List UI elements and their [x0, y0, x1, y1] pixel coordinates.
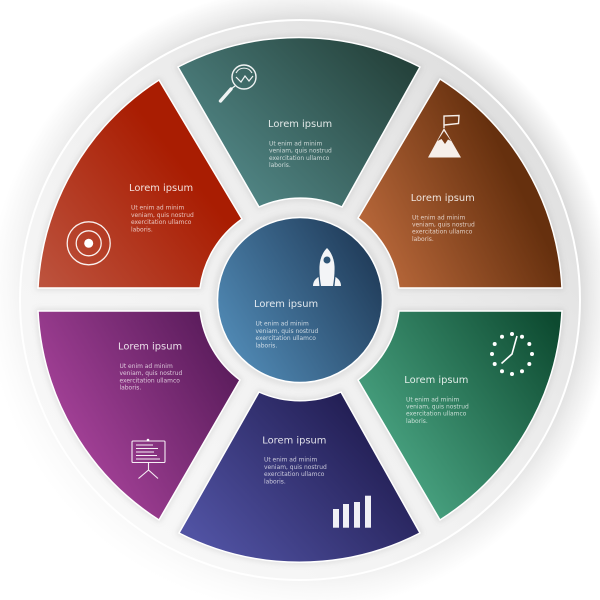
icon: mountain with flag: [428, 116, 461, 158]
body text: Ut enim ad minim: [264, 457, 317, 464]
body text: laboris.: [269, 162, 291, 169]
body text: exercitation ullamco: [406, 411, 467, 418]
body text: exercitation ullamco: [264, 471, 325, 478]
panel: brown segment: [358, 79, 562, 288]
panel: green segment: [358, 311, 562, 520]
icon: clock: [490, 332, 534, 376]
panel: red segment: [38, 80, 242, 288]
body text: veniam, quis nostrud: [256, 328, 318, 335]
body text: exercitation ullamco: [120, 377, 180, 384]
body text: Ut enim ad minim: [269, 140, 322, 148]
body text: laboris.: [406, 418, 428, 425]
heading: Lorem ipsum: [262, 435, 326, 446]
body text: Ut enim ad minim: [412, 214, 465, 221]
circle shape: [218, 218, 382, 382]
body text: veniam, quis nostrud: [264, 464, 327, 471]
body text: veniam, quis nostrud: [406, 404, 469, 410]
panel: purple segment: [38, 311, 240, 520]
segment shape: [38, 311, 240, 520]
body text: laboris.: [264, 478, 286, 485]
segment shape: [358, 79, 562, 288]
body text: Ut enim ad minim: [406, 396, 459, 403]
body text: exercitation ullamco: [256, 335, 316, 342]
body text: laboris.: [120, 385, 141, 392]
heading: Lorem ipsum: [411, 193, 475, 204]
segment shape: [179, 392, 420, 562]
icon: presentation board: [132, 439, 165, 478]
panel: bottom navy segment: [179, 392, 420, 562]
body text: exercitation ullamco: [131, 219, 192, 226]
body text: exercitation ullamco: [269, 155, 330, 162]
segment shape: [358, 311, 562, 520]
body text: Ut enim ad minim: [256, 321, 309, 328]
icon: bar chart: [333, 496, 371, 528]
soft segment shading: [38, 38, 562, 562]
segment shape: [178, 38, 420, 207]
body text: veniam, quis nostrud: [120, 370, 182, 377]
panel: top teal segment: [178, 38, 420, 207]
body text: Ut enim ad minim: [120, 363, 173, 370]
segment shape: [38, 80, 242, 288]
body text: laboris.: [256, 342, 277, 349]
icon: rocket: [313, 248, 341, 286]
heading: Lorem ipsum: [129, 183, 193, 194]
body text: laboris.: [131, 226, 153, 233]
icon: target: [67, 222, 110, 265]
icon: magnifier with chart: [220, 65, 256, 101]
body text: Ut enim ad minim: [131, 205, 184, 212]
heading: Lorem ipsum: [118, 341, 182, 352]
body text: veniam, quis nostrud: [269, 148, 332, 155]
body text: exercitation ullamco: [412, 229, 473, 236]
panel: center circle: [218, 218, 382, 382]
body text: veniam, quis nostrud: [131, 212, 194, 219]
body text: veniam, quis nostrud: [412, 222, 475, 228]
heading: Lorem ipsum: [254, 299, 318, 310]
heading: Lorem ipsum: [268, 119, 332, 130]
body text: laboris.: [412, 236, 434, 243]
heading: Lorem ipsum: [404, 375, 468, 386]
